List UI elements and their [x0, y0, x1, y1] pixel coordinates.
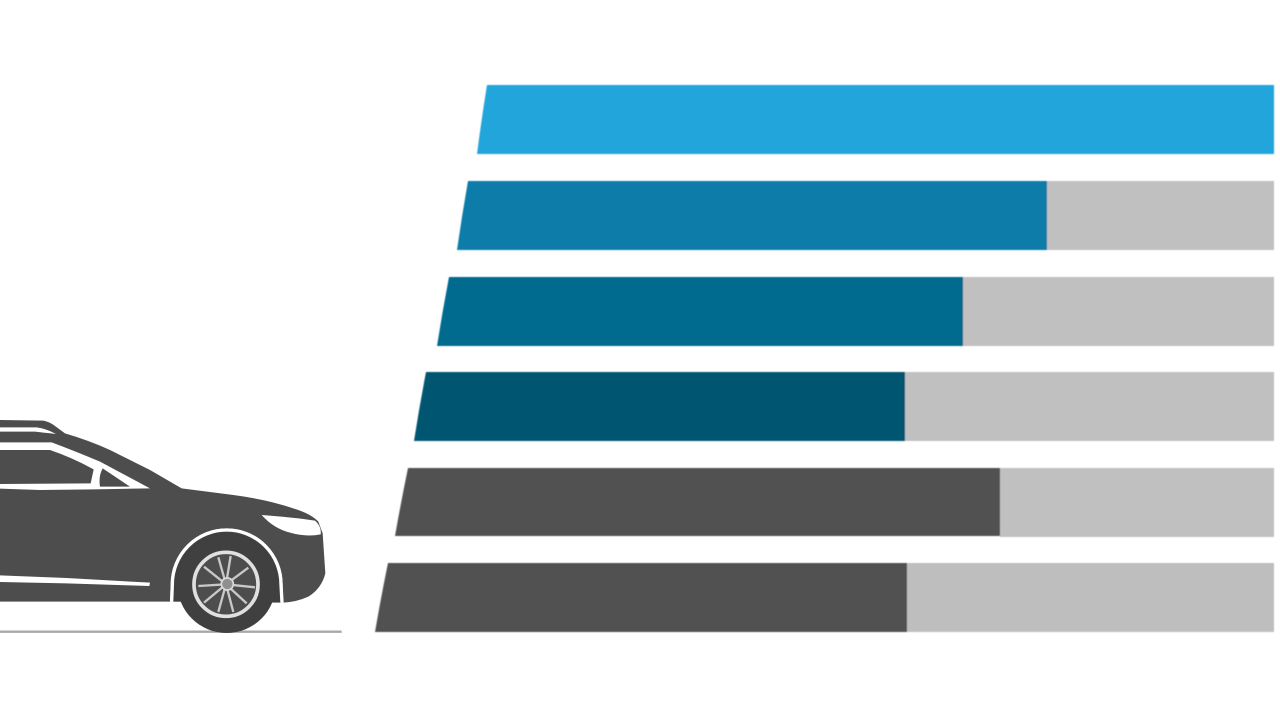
window frame — [0, 442, 150, 490]
bar 4: dark teal with grey remainder — [414, 372, 1274, 441]
bar 2: teal blue with grey remainder — [457, 181, 1274, 250]
headlight — [262, 515, 321, 536]
car body — [0, 420, 325, 603]
rim — [194, 552, 258, 616]
bar 6: dark grey with light grey remainder — [375, 563, 1274, 632]
roof rail highlight — [0, 427, 56, 434]
bar 5: dark grey with light grey remainder — [395, 468, 1274, 537]
spokes — [198, 556, 255, 612]
side window — [0, 450, 94, 484]
bar chart — [375, 85, 1274, 632]
wheel arch — [172, 530, 282, 603]
door crease — [0, 575, 150, 586]
icon: car — [0, 420, 342, 633]
tire — [177, 534, 276, 633]
bar 1: full blue — [477, 85, 1274, 154]
bar 3: deep teal with grey remainder — [437, 277, 1274, 346]
quarter glass — [100, 468, 130, 487]
road line — [0, 628, 342, 635]
wheel hub — [221, 578, 233, 590]
